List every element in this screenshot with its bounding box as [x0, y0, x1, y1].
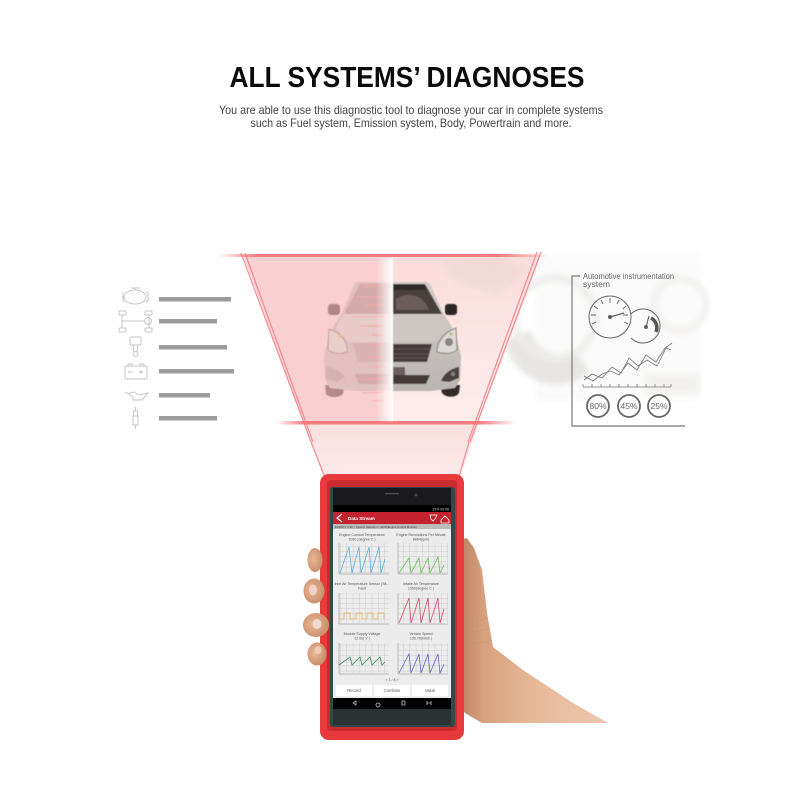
- wheel: [440, 385, 460, 397]
- chart: vehicle speed: [398, 632, 448, 674]
- title: ALL SYSTEMS’ DIAGNOSES: [230, 62, 584, 94]
- speedometer: [589, 296, 631, 338]
- instrumentation panel: [572, 271, 685, 426]
- car right half, real colours: [393, 282, 461, 397]
- panel heading: system: [583, 279, 610, 289]
- chart: module supply voltage: [339, 632, 389, 674]
- percentage labels: 45%: [620, 401, 638, 411]
- subtitle text: [219, 103, 603, 130]
- phone case: [320, 474, 464, 740]
- buttons: [336, 685, 448, 696]
- buttons: Combine: [384, 688, 401, 693]
- navigation bar: [333, 698, 451, 709]
- buttons: Record: [347, 688, 361, 693]
- beam right half: [392, 255, 541, 423]
- phone: Data Stream: [348, 516, 375, 521]
- panel heading: [583, 271, 674, 289]
- mirror: [445, 304, 457, 315]
- subtitle text: You are able to use this diagnostic tool to diagnose your car in complete systems: [219, 103, 603, 117]
- grille: [393, 344, 432, 362]
- fuel gauge: [631, 309, 660, 343]
- chart: engine revolutions: [396, 533, 448, 574]
- chart: module supply voltage: 12.00( V ): [354, 636, 370, 640]
- finger 4: [308, 642, 326, 666]
- breadcrumb bar: [333, 524, 451, 529]
- car: [324, 258, 461, 421]
- engine ghost in beam: [440, 258, 530, 295]
- hand palm and wrist: [455, 538, 608, 723]
- system icons: [119, 288, 152, 429]
- plate and lower grille: [393, 367, 405, 375]
- header icons: [430, 515, 449, 523]
- icon: spark plug: [133, 407, 138, 429]
- icon: engine: [123, 288, 148, 304]
- car left half, tinted: [324, 282, 392, 397]
- phone: [320, 474, 464, 740]
- chart: inlet air sensor: Fault: [358, 586, 366, 590]
- bottom light line: [276, 421, 516, 424]
- chart: engine revolutions: Engine Revolutions Per Minute: [396, 533, 446, 537]
- chart: inlet air sensor: [335, 582, 389, 624]
- pagination: < 1 / 8 >: [385, 678, 399, 682]
- icon: oil can: [125, 392, 148, 400]
- finger 2: [304, 578, 324, 604]
- hood: [393, 314, 449, 342]
- chart: intake air: 1050(degree C ): [408, 586, 434, 590]
- buttons: Value: [425, 688, 436, 693]
- lower beam: [304, 423, 479, 478]
- screen content: [333, 529, 451, 698]
- phone: 19% 09:56: [432, 508, 449, 512]
- phone bezel: [330, 487, 455, 727]
- top light line: [218, 254, 548, 257]
- center dissolve band: [376, 258, 393, 421]
- finger 1: [308, 548, 322, 572]
- chart: module supply voltage: Module Supply Voltage: [344, 632, 380, 636]
- subtitle text: such as Fuel system, Emission system, Body, Powertrain and more.: [250, 116, 572, 130]
- chart: inlet air sensor: Inlet Air Temperature Sensor (Sit...: [335, 582, 389, 586]
- fog lamp: [441, 367, 459, 382]
- palm creases: [466, 617, 492, 643]
- hand fingers: [303, 548, 329, 666]
- panel axis: [572, 276, 685, 426]
- icon: battery: [125, 364, 147, 379]
- chart: intake air: [398, 582, 448, 624]
- line chart: [583, 343, 672, 387]
- percentage circles: [587, 395, 670, 417]
- chart axis: [583, 384, 671, 387]
- panel heading: Automotive instrumentation: [583, 271, 674, 281]
- windshield: [393, 284, 442, 314]
- headlight: [437, 328, 457, 353]
- chart: engine revolutions: 8864(rpm): [413, 538, 429, 542]
- beam edges: [241, 252, 541, 480]
- chart: vehicle speed: Vehicle Speed: [410, 632, 432, 636]
- engine background image: [505, 254, 706, 400]
- chart: engine coolant: [339, 533, 389, 574]
- chart: intake air: Intake Air Temperature: [403, 582, 439, 586]
- status bar: [333, 505, 451, 512]
- icon: piston: [130, 337, 141, 356]
- chart: engine coolant: Engine Coolant Temperature: [339, 533, 385, 537]
- percentage labels: 25%: [650, 401, 668, 411]
- icon: axle: [119, 311, 152, 332]
- car body: [393, 282, 461, 391]
- percentage labels: [589, 401, 668, 411]
- chart: vehicle speed: 106.70(km/h ): [410, 636, 432, 640]
- pink dissolve stripes: [352, 285, 384, 402]
- phone: EOBDTV 4.90 > System Selection > ECM(Engine Control Module): [335, 525, 417, 529]
- percentage labels: 80%: [589, 401, 607, 411]
- diagnostic beam: [218, 252, 548, 480]
- app header: [333, 512, 451, 524]
- chart: engine coolant: 1050 (degree C ): [348, 538, 376, 542]
- lower bezel: [333, 709, 451, 725]
- finger 3: [303, 613, 329, 637]
- beam left half: [243, 255, 392, 423]
- camera speaker: [385, 493, 399, 494]
- icon legend bars: [159, 297, 234, 420]
